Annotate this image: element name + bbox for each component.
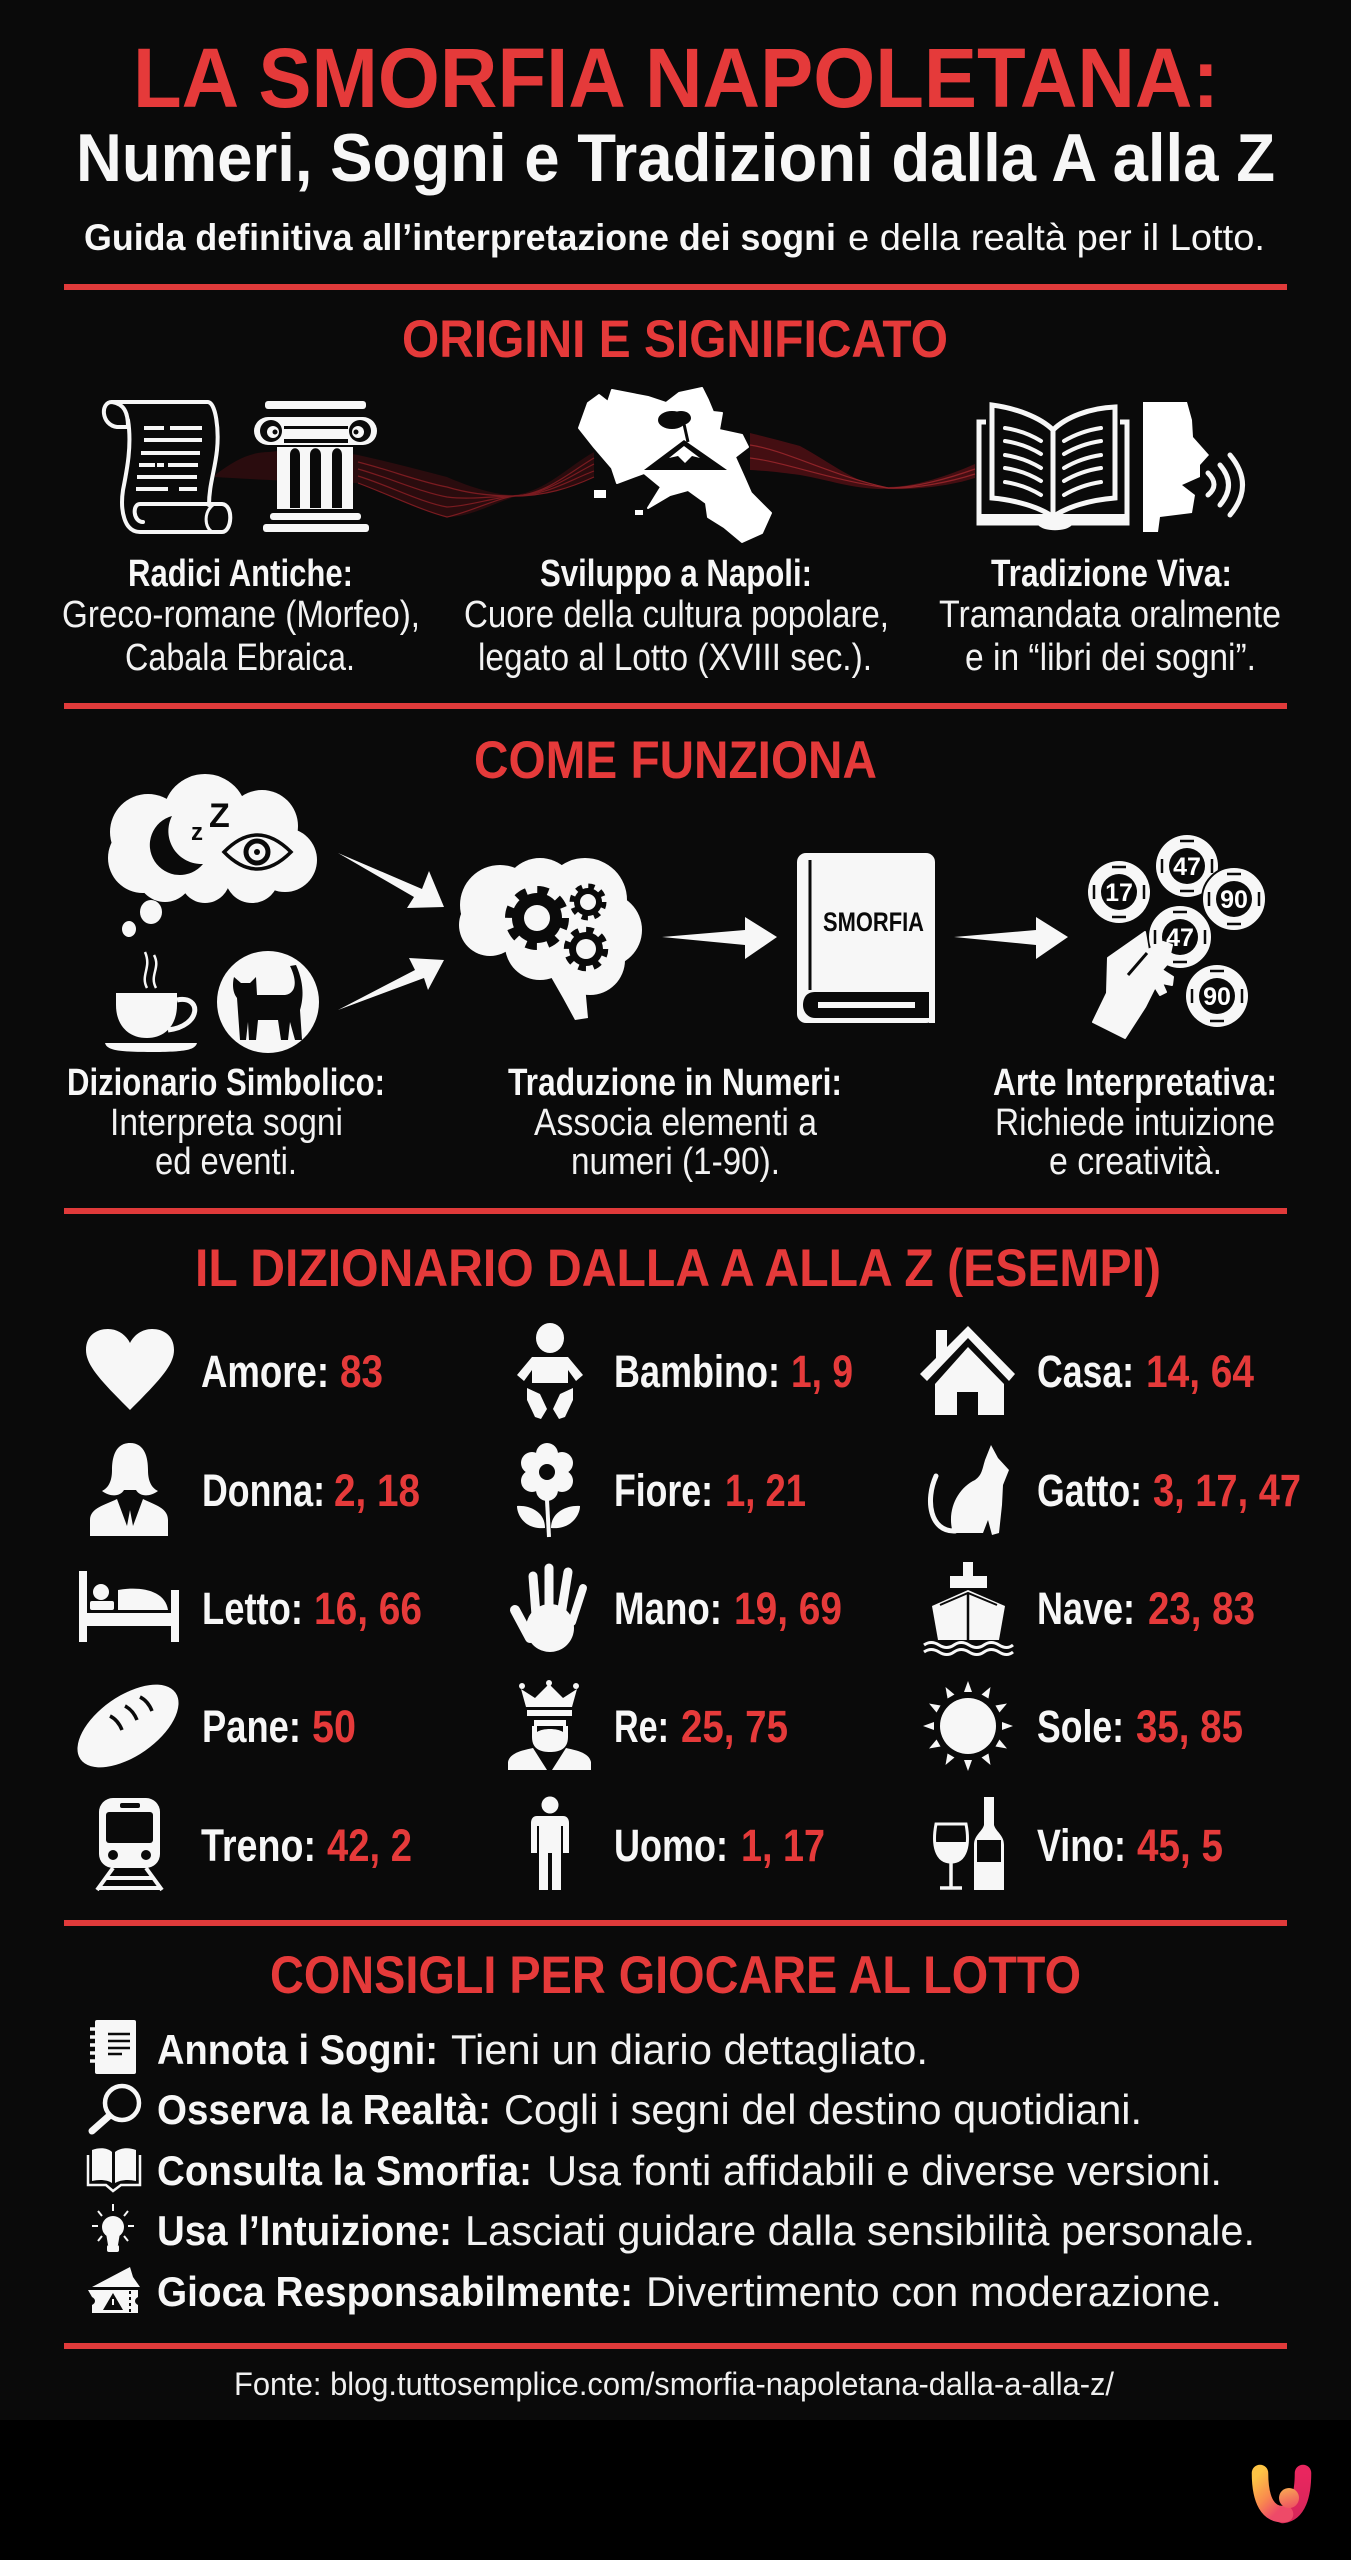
entry: fiore: 1, 21 (725, 1465, 806, 1516)
icon: heart (86, 1329, 174, 1410)
tip: usa l'intuizione: Usa l’Intuizione: (157, 2207, 452, 2254)
icon: sun (923, 1681, 1013, 1771)
ball 17 (1088, 861, 1150, 923)
tip: usa l'intuizione: Lasciati guidare dalla sensibilità personale. (465, 2207, 1255, 2254)
entry: gatto: Gatto: (1037, 1465, 1142, 1516)
caption: radici antiche: Radici Antiche: (128, 553, 353, 595)
ball 90 bottom: 90 (1203, 983, 1231, 1011)
icon: scroll (104, 402, 230, 532)
icon: smorfia book (797, 853, 935, 1023)
entry: pane (63, 1668, 356, 1784)
caption: traduzione in numeri (508, 1062, 842, 1183)
entry: pane: Pane: (202, 1701, 301, 1752)
panel: dizionario (63, 1239, 1301, 1890)
entry: re: 25, 75 (681, 1701, 788, 1752)
entry: amore (86, 1329, 383, 1410)
entry: nave: Nave: (1037, 1583, 1135, 1634)
icon: wine glass and bottle (935, 1797, 1004, 1890)
hand (1093, 932, 1173, 1038)
tagline (84, 217, 1265, 258)
entry: bambino: 1, 9 (791, 1346, 853, 1397)
entry: re: Re: (614, 1701, 669, 1752)
entry: letto: Letto: (202, 1583, 303, 1634)
entry: re (508, 1680, 788, 1770)
caption: traduzione in numeri: numeri (1-90). (571, 1141, 780, 1183)
icon: brain with gears (459, 858, 642, 1020)
icon: baby (517, 1323, 583, 1419)
icon: light bulb (92, 2204, 134, 2252)
heading: origini: ORIGINI E SIGNIFICATO (402, 310, 948, 369)
entry: treno (97, 1798, 412, 1890)
entry: gatto (930, 1445, 1301, 1535)
entry: fiore: Fiore: (614, 1465, 713, 1516)
icon: column (254, 401, 377, 532)
tip: gioca responsabilmente: Gioca Responsabilmente: (157, 2268, 633, 2315)
entry: pane: 50 (312, 1701, 356, 1752)
entry: donna: Donna: (202, 1465, 325, 1516)
tip: consulta la smorfia: Consulta la Smorfia: (157, 2147, 532, 2194)
caption: sviluppo a napoli: Cuore della cultura popolare, (464, 594, 889, 636)
tip: gioca responsabilmente: Divertimento con moderazione. (646, 2268, 1222, 2315)
ball 47 top: 47 (1173, 853, 1201, 881)
icon: king (508, 1680, 591, 1770)
caption: traduzione in numeri: Traduzione in Numeri: (508, 1062, 842, 1104)
caption: tradizione viva: Tradizione Viva: (991, 553, 1232, 595)
caption: radici antiche (62, 553, 420, 679)
entry: sole: 35, 85 (1136, 1701, 1243, 1752)
logo (1260, 2473, 1303, 2515)
icon: house (920, 1326, 1015, 1415)
icon: smorfia book: SMORFIA (823, 907, 924, 937)
tip: usa l'intuizione (92, 2204, 1255, 2254)
icon: cat (930, 1445, 1009, 1535)
icon: black cat in circle (217, 951, 319, 1053)
icon: hand (515, 1568, 583, 1652)
entry: treno: Treno: (201, 1820, 316, 1871)
entry: donna (90, 1443, 420, 1536)
entry: donna: 2, 18 (334, 1465, 420, 1516)
ball 90 right: 90 (1220, 886, 1248, 914)
icon: notebook (90, 2020, 136, 2074)
icon: campania map with volcano (579, 388, 771, 542)
entry: amore: 83 (340, 1346, 383, 1397)
tip: annota i sogni: Annota i Sogni: (157, 2026, 438, 2073)
tip: annota i sogni (90, 2020, 928, 2074)
caption: sviluppo a napoli: Sviluppo a Napoli: (540, 553, 812, 595)
caption: sviluppo a napoli (464, 553, 889, 679)
icon: man (531, 1796, 569, 1890)
icon: dream cloud: z (191, 819, 203, 846)
panel: origini e significato (62, 310, 1281, 679)
caption: radici antiche: Greco-romane (Morfeo), (62, 594, 420, 636)
arrow: brain to book (662, 917, 777, 959)
caption: radici antiche: Cabala Ebraica. (125, 637, 355, 679)
tip: consulta la smorfia (88, 2147, 1222, 2194)
tagline: Guida definitiva all’interpretazione dei sogni (84, 217, 836, 258)
entry: vino (935, 1797, 1223, 1890)
icon: dream cloud (108, 774, 317, 937)
icon: woman (90, 1443, 168, 1536)
tip: osserva la realtà (92, 2086, 1142, 2133)
entry: nave (924, 1562, 1255, 1654)
entry: nave: 23, 83 (1148, 1583, 1255, 1634)
heading: dizionario: IL DIZIONARIO DALLA A ALLA Z (ESEMPI) (195, 1239, 1161, 1298)
icon: magnifier (92, 2086, 139, 2131)
icon: bread (63, 1668, 193, 1784)
panel: come funziona (67, 731, 1277, 1183)
entry: uomo (531, 1796, 825, 1890)
subtitle: Numeri, Sogni e Tradizioni dalla A alla Z (76, 120, 1275, 196)
caption: arte interpretativa: Arte Interpretativa: (993, 1062, 1277, 1104)
icon: book and speaking head (977, 402, 1242, 532)
entry: uomo: 1, 17 (741, 1820, 825, 1871)
tip: osserva la realtà: Osserva la Realtà: (157, 2086, 491, 2133)
arrow: book to numbers (954, 917, 1068, 959)
icon: flower (517, 1443, 580, 1537)
caption: dizionario simbolico: Interpreta sogni (110, 1102, 343, 1144)
tip: gioca responsabilmente (88, 2267, 1222, 2315)
entry: casa: 14, 64 (1146, 1346, 1254, 1397)
title: LA SMORFIA NAPOLETANA: (133, 31, 1219, 125)
icon: bed (79, 1571, 179, 1642)
entry: sole (923, 1681, 1243, 1771)
caption: tradizione viva (939, 553, 1281, 679)
caption: traduzione in numeri: Associa elementi a (534, 1102, 818, 1144)
entry: bambino (517, 1323, 853, 1419)
entry: vino: 45, 5 (1137, 1820, 1223, 1871)
ball 47 front (1148, 905, 1212, 969)
caption: arte interpretativa (993, 1062, 1277, 1183)
caption: dizionario simbolico: Dizionario Simbolico: (67, 1062, 385, 1104)
entry: uomo: Uomo: (614, 1820, 728, 1871)
entry: amore: Amore: (201, 1346, 329, 1397)
source line: Fonte: blog.tuttosemplice.com/smorfia-napoletana-dalla-a-alla-z/ (234, 2366, 1114, 2402)
ball 90 right (1202, 867, 1266, 931)
caption: sviluppo a napoli: legato al Lotto (XVIII sec.). (478, 637, 872, 679)
entry: mano: Mano: (614, 1583, 722, 1634)
panel: consigli (88, 1946, 1255, 2315)
icon: dream cloud: Z (209, 797, 230, 835)
icon: lottery balls with hand (1088, 835, 1266, 1038)
icon: coffee cup (105, 952, 197, 1052)
icon: open book (88, 2148, 140, 2191)
entry: casa: Casa: (1037, 1346, 1134, 1397)
tip: consulta la smorfia: Usa fonti affidabili e diverse versioni. (547, 2147, 1222, 2194)
ball 17: 17 (1105, 879, 1133, 907)
entry: vino: Vino: (1037, 1820, 1126, 1871)
icon: tickets with warning (88, 2267, 140, 2313)
caption: arte interpretativa: Richiede intuizione (995, 1102, 1275, 1144)
entry: casa (920, 1326, 1254, 1415)
header: title block (76, 31, 1275, 258)
tip: annota i sogni: Tieni un diario dettagliato. (451, 2026, 928, 2073)
caption: tradizione viva: Tramandata oralmente (939, 594, 1281, 636)
entry: mano (515, 1568, 842, 1652)
entry: mano: 19, 69 (734, 1583, 842, 1634)
entry: treno: 42, 2 (327, 1820, 412, 1871)
tip: osserva la realtà: Cogli i segni del destino quotidiani. (504, 2086, 1142, 2133)
arrow: cloud to brain (338, 853, 444, 908)
ball 47 top (1156, 835, 1218, 897)
ball 90 bottom (1186, 965, 1248, 1027)
entry: sole: Sole: (1037, 1701, 1124, 1752)
red wave (215, 433, 975, 517)
entry: letto: 16, 66 (314, 1583, 422, 1634)
caption: dizionario simbolico (67, 1062, 385, 1183)
icon: train (97, 1798, 162, 1890)
caption: tradizione viva: e in “libri dei sogni”. (965, 637, 1256, 679)
arrow: objects to brain (338, 958, 444, 1010)
entry: gatto: 3, 17, 47 (1153, 1465, 1301, 1516)
tagline: e della realtà per il Lotto. (848, 217, 1265, 258)
entry: fiore (517, 1443, 806, 1537)
ball 47 front: 47 (1166, 924, 1194, 952)
caption: dizionario simbolico: ed eventi. (155, 1141, 297, 1183)
heading: consigli: CONSIGLI PER GIOCARE AL LOTTO (270, 1946, 1081, 2005)
entry: bambino: Bambino: (614, 1346, 780, 1397)
caption: arte interpretativa: e creatività. (1049, 1141, 1222, 1183)
icon: ship (924, 1562, 1013, 1654)
heading: come funziona: COME FUNZIONA (474, 731, 877, 790)
entry: letto (79, 1571, 422, 1642)
